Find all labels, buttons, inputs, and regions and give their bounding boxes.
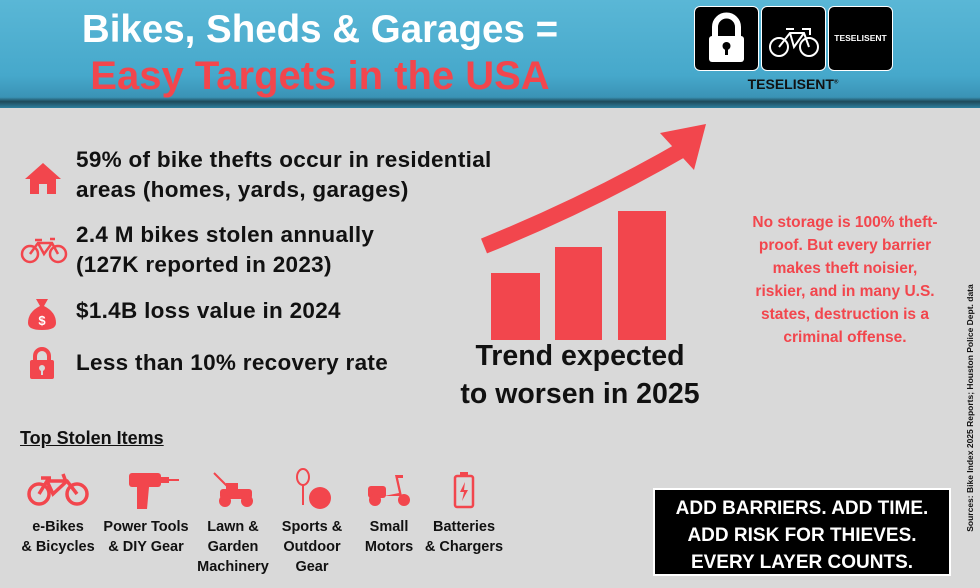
callout: red text: criminal offense. <box>783 329 907 346</box>
stat 1 <box>76 147 492 202</box>
icon: scooter <box>368 475 410 506</box>
label: lawn: Machinery <box>197 559 269 575</box>
sources vertical: Sources: Bike Index 2025 Reports; Houston Police Dept. data <box>965 284 975 532</box>
items row <box>27 468 474 509</box>
label: lawn <box>197 519 269 575</box>
header band <box>0 0 980 108</box>
icon: bicycle <box>27 473 89 506</box>
stat 3: $1.4B loss value in 2024 <box>76 298 341 323</box>
label: batteries <box>425 519 503 555</box>
label: sports: Outdoor <box>283 539 341 555</box>
title: Bikes, Sheds & Garages = <box>82 8 558 51</box>
icon: sports <box>296 468 331 509</box>
callout: red text: riskier, and in many U.S. <box>755 283 935 300</box>
chart caption: to worsen in 2025 <box>460 378 700 410</box>
label: lawn: Garden <box>208 539 258 555</box>
chart caption: Trend expected <box>475 340 685 372</box>
stat 2: (127K reported in 2023) <box>76 252 332 277</box>
label: tools: & DIY Gear <box>108 539 184 555</box>
icon: lock <box>30 347 54 379</box>
icon: drill <box>129 473 179 509</box>
icon: money bag <box>28 299 56 330</box>
label: batteries: Batteries <box>433 519 495 535</box>
label: batteries: & Chargers <box>425 539 503 555</box>
stat 1: 59% of bike thefts occur in residential <box>76 147 492 172</box>
heading: top stolen items: Top Stolen Items <box>20 428 164 448</box>
callout box: black: ADD RISK FOR THIEVES. <box>687 525 917 546</box>
icon: battery <box>454 472 474 508</box>
callout box: black: EVERY LAYER COUNTS. <box>691 552 913 573</box>
callout: red text: proof. But every barrier <box>759 237 931 254</box>
label: lawn: Lawn & <box>207 519 259 535</box>
stats list <box>20 163 68 379</box>
label: sports: Sports & <box>282 519 342 535</box>
chart: rising bars with arrow <box>481 124 706 340</box>
stat 1: areas (homes, yards, garages) <box>76 177 409 202</box>
chart caption <box>460 340 700 410</box>
logo: TESELISENT <box>834 33 887 43</box>
label: motors <box>365 519 413 555</box>
label: bikes <box>21 519 95 555</box>
stat 2: 2.4 M bikes stolen annually <box>76 222 374 247</box>
logo: TESELISENT® <box>748 76 838 92</box>
label: bikes: e-Bikes <box>32 519 84 535</box>
label: bikes: & Bicycles <box>21 539 95 555</box>
icon: money bag: $ <box>38 313 46 328</box>
stat 4: Less than 10% recovery rate <box>76 350 388 375</box>
label: motors: Motors <box>365 539 413 555</box>
callout: red text: makes theft noisier, <box>773 260 917 277</box>
logo <box>694 6 893 92</box>
stat 2 <box>76 222 374 277</box>
callout box: black <box>653 488 951 576</box>
icon: bike <box>20 238 68 264</box>
icon: house <box>25 163 61 194</box>
callout: red text: states, destruction is a <box>761 306 929 323</box>
title: Easy Targets in the USA <box>90 54 550 98</box>
title <box>82 8 558 98</box>
label: tools <box>103 519 189 555</box>
label: tools: Power Tools <box>103 519 189 535</box>
label: sports: Gear <box>295 559 329 575</box>
label: motors: Small <box>370 519 408 535</box>
callout box: black: ADD BARRIERS. ADD TIME. <box>676 498 928 519</box>
label: sports <box>282 519 342 575</box>
callout: red text: No storage is 100% theft- <box>752 214 938 231</box>
icon: lawn mower <box>213 472 253 507</box>
callout: red text <box>752 214 938 346</box>
